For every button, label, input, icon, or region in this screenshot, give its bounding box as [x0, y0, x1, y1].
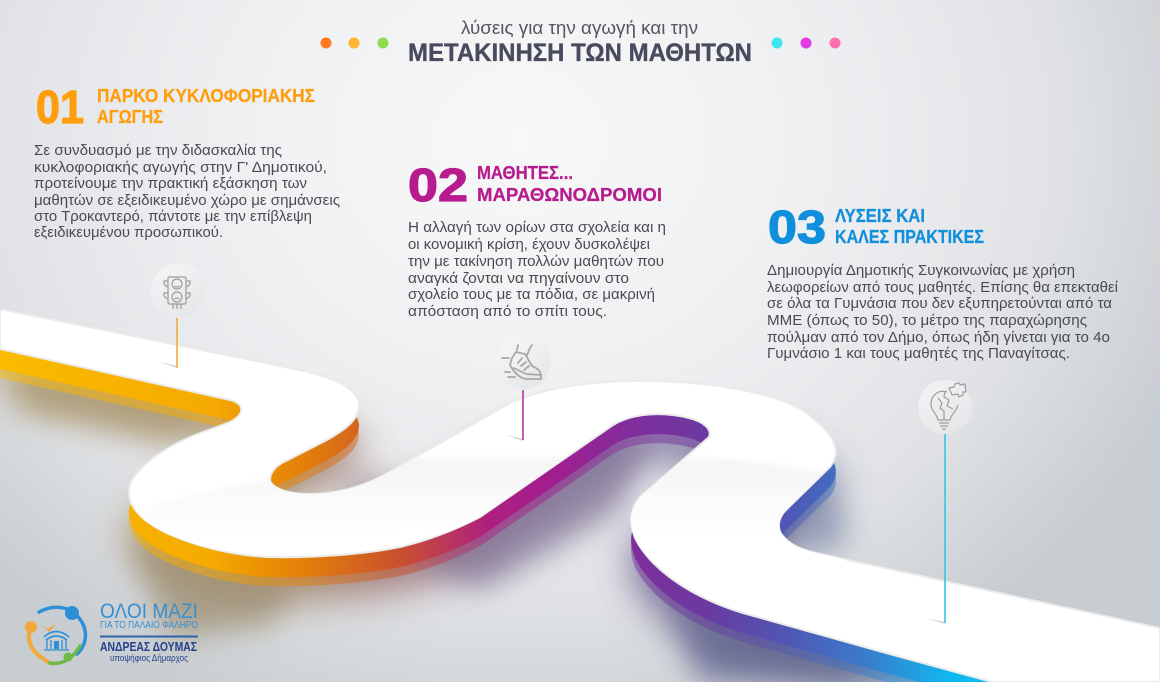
main title: ΜΕΤΑΚΙΝΗΣΗ ΤΩΝ ΜΑΘΗΤΩΝ	[408, 39, 752, 67]
decorative dots right	[772, 38, 840, 48]
body text 03	[767, 263, 1119, 362]
body text 02: αναγκά ζονται να πηγαίνουν στο	[408, 271, 629, 287]
marker: idea bulb pin	[918, 380, 972, 624]
winding road	[0, 309, 1160, 682]
body text 01: κυκλοφοριακής αγωγής στην Γ' Δημοτικού,	[34, 160, 327, 176]
logo wordmark: υποψήφιος Δήμαρχος	[110, 653, 188, 664]
body text 03: πούλμαν από τον Δήμο, όπως ήδη γίνεται για το 4ο	[767, 330, 1110, 346]
header	[320, 18, 840, 67]
logo wordmark: ΓΙΑ ΤΟ ΠΑΛΑΙΟ ΦΑΛΗΡΟ	[100, 619, 198, 631]
body text 01: Σε συνδυασμό με την διδασκαλία της	[34, 143, 282, 159]
body text 02: Η αλλαγή των ορίων στα σχολεία και η	[408, 220, 666, 236]
body text 02: την με τακίνηση πολλών μαθητών που	[408, 254, 664, 270]
body text 01	[34, 143, 340, 241]
logo	[25, 600, 198, 664]
decorative dots left	[320, 38, 388, 48]
number 03: 03	[768, 201, 826, 253]
body text 03: Δημιουργία Δημοτικής Συγκοινωνίας με χρήση	[767, 263, 1075, 279]
marker: running shoe pin	[496, 335, 550, 441]
number 01: 01	[36, 81, 84, 133]
icon: puzzle bulb	[931, 383, 966, 429]
icon: traffic light	[164, 277, 190, 309]
heading 03: ΛΥΣΕΙΣ ΚΑΙ	[835, 206, 925, 226]
marker: traffic light pin	[151, 263, 205, 368]
logo wordmark: ΑΝΔΡΕΑΣ ΔΟΥΜΑΣ	[100, 640, 197, 654]
heading 03: ΚΑΛΕΣ ΠΡΑΚΤΙΚΕΣ	[835, 227, 984, 247]
body text 03: Γυμνάσιο 1 και τους μαθητές της Παναγίτσας.	[767, 346, 1070, 362]
panel: step 03	[767, 201, 1119, 362]
icon: running shoe	[502, 345, 541, 379]
body text 03: σε όλα τα Γυμνάσια που δεν εξυπηρετούνται από τα	[767, 296, 1112, 312]
logo wordmark: ΟΛΟΙ ΜΑΖΙ	[100, 600, 198, 623]
body text 03: ΜΜΕ (όπως το 50), το μέτρο της παραχώρησης	[767, 313, 1087, 329]
logo emblem	[25, 606, 85, 663]
body text 01: προτείνουμε την πρακτική εξάσκηση των	[34, 176, 307, 192]
body text 02: οι κονομική κρίση, έχουν δυσκολέψει	[408, 237, 650, 253]
body text 02: σχολείο τους με τα πόδια, σε μακρινή	[408, 287, 655, 303]
heading 01	[97, 86, 315, 127]
heading 01: ΑΓΩΓΗΣ	[97, 107, 163, 127]
body text 02	[408, 220, 666, 320]
body text 01: μαθητών σε εξειδικευμένο χώρο με σημάνσεις	[34, 193, 340, 209]
heading 02: ΜΑΘΗΤΕΣ...	[477, 163, 573, 183]
body text 02: απόσταση από το σπίτι τους.	[408, 304, 607, 320]
logo wordmark	[100, 600, 198, 664]
panel: step 01	[34, 81, 340, 241]
body text 01: εξειδικευμένου προσωπικού.	[34, 225, 223, 241]
heading 02: ΜΑΡΑΘΩΝΟΔΡΟΜΟΙ	[477, 185, 662, 205]
panel: step 02	[408, 159, 666, 320]
heading 03	[835, 206, 984, 247]
road shadow	[0, 351, 1160, 682]
heading 02	[477, 163, 662, 205]
body text 03: λεωφορείων από τους μαθητές. Επίσης θα επεκταθεί	[767, 280, 1119, 296]
local ground shadows	[20, 370, 860, 682]
heading 01: ΠΑΡΚΟ ΚΥΚΛΟΦΟΡΙΑΚΗΣ	[97, 86, 315, 106]
number 02: 02	[408, 159, 468, 211]
subtitle: λύσεις για την αγωγή και την	[461, 18, 698, 38]
body text 01: στο Τροκαντερό, πάντοτε με την επίβλεψη	[34, 209, 312, 225]
